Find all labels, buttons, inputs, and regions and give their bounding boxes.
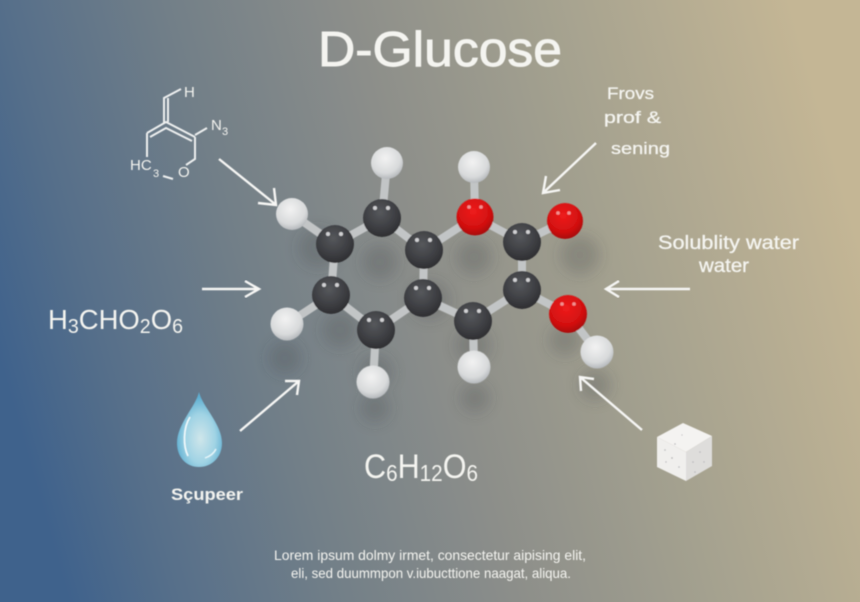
arrow: solubility to molecule <box>606 281 690 297</box>
label: solubility <box>658 233 800 277</box>
label: center formula: 6 <box>466 460 478 486</box>
label: center formula: C <box>364 448 389 486</box>
arrow: formula to hydrogen <box>219 159 276 205</box>
molecule bonds <box>287 163 597 382</box>
icon: structural formula: H <box>184 84 195 101</box>
icon: structural formula: O <box>178 164 190 181</box>
text block: footer note: Lorem ipsum dolmy irmet, consectetur aipising elit, <box>274 547 586 563</box>
label: left formula: 6 <box>172 316 183 338</box>
arrow: sugar cube to molecule <box>580 377 642 430</box>
label: left formula: H <box>48 304 68 335</box>
label: water drop: Sçupeer <box>171 485 243 504</box>
title: D-Glucose <box>318 23 562 77</box>
atom highlights <box>322 206 530 322</box>
icon: structural formula: N <box>211 117 222 134</box>
icon: structural formula: 3 <box>222 126 228 138</box>
molecule: 3D ball and stick model <box>268 147 614 423</box>
label: left formula: O <box>151 304 172 335</box>
hydrogen atoms <box>270 147 614 398</box>
arrow: left formula to molecule <box>202 281 259 297</box>
label: top right text <box>604 84 670 158</box>
label: solubility: Solublity water <box>658 233 800 254</box>
icon: sugar cube <box>657 423 712 481</box>
label: center formula: H <box>398 448 420 486</box>
label: top right text: prof & <box>604 108 662 127</box>
molecule shadows <box>268 228 611 423</box>
icon: structural formula: HC <box>130 157 152 174</box>
arrow: top right text to oxygen <box>543 143 596 193</box>
carbon atoms <box>312 199 541 349</box>
icon: water drop <box>177 392 222 467</box>
label: top right text: sening <box>611 139 670 158</box>
arrow: drop to molecule <box>240 381 299 431</box>
label: solubility: water <box>698 256 750 277</box>
icon: structural formula: 3 <box>153 168 159 180</box>
oxygen atoms <box>456 198 587 333</box>
label: center formula: 12 <box>420 460 443 486</box>
label: left formula: 3 <box>68 316 79 338</box>
label: left formula: 2 <box>140 316 151 338</box>
text block: footer note <box>274 547 586 581</box>
text block: footer note: eli, sed duummpon v.iubucttione naagat, aliqua. <box>291 565 571 581</box>
label: center formula: 6 <box>386 460 398 486</box>
icon: structural formula <box>130 84 228 181</box>
label: top right text: Frovs <box>607 84 654 103</box>
label: left formula: CHO <box>79 304 140 335</box>
label: center formula: O <box>443 448 466 486</box>
